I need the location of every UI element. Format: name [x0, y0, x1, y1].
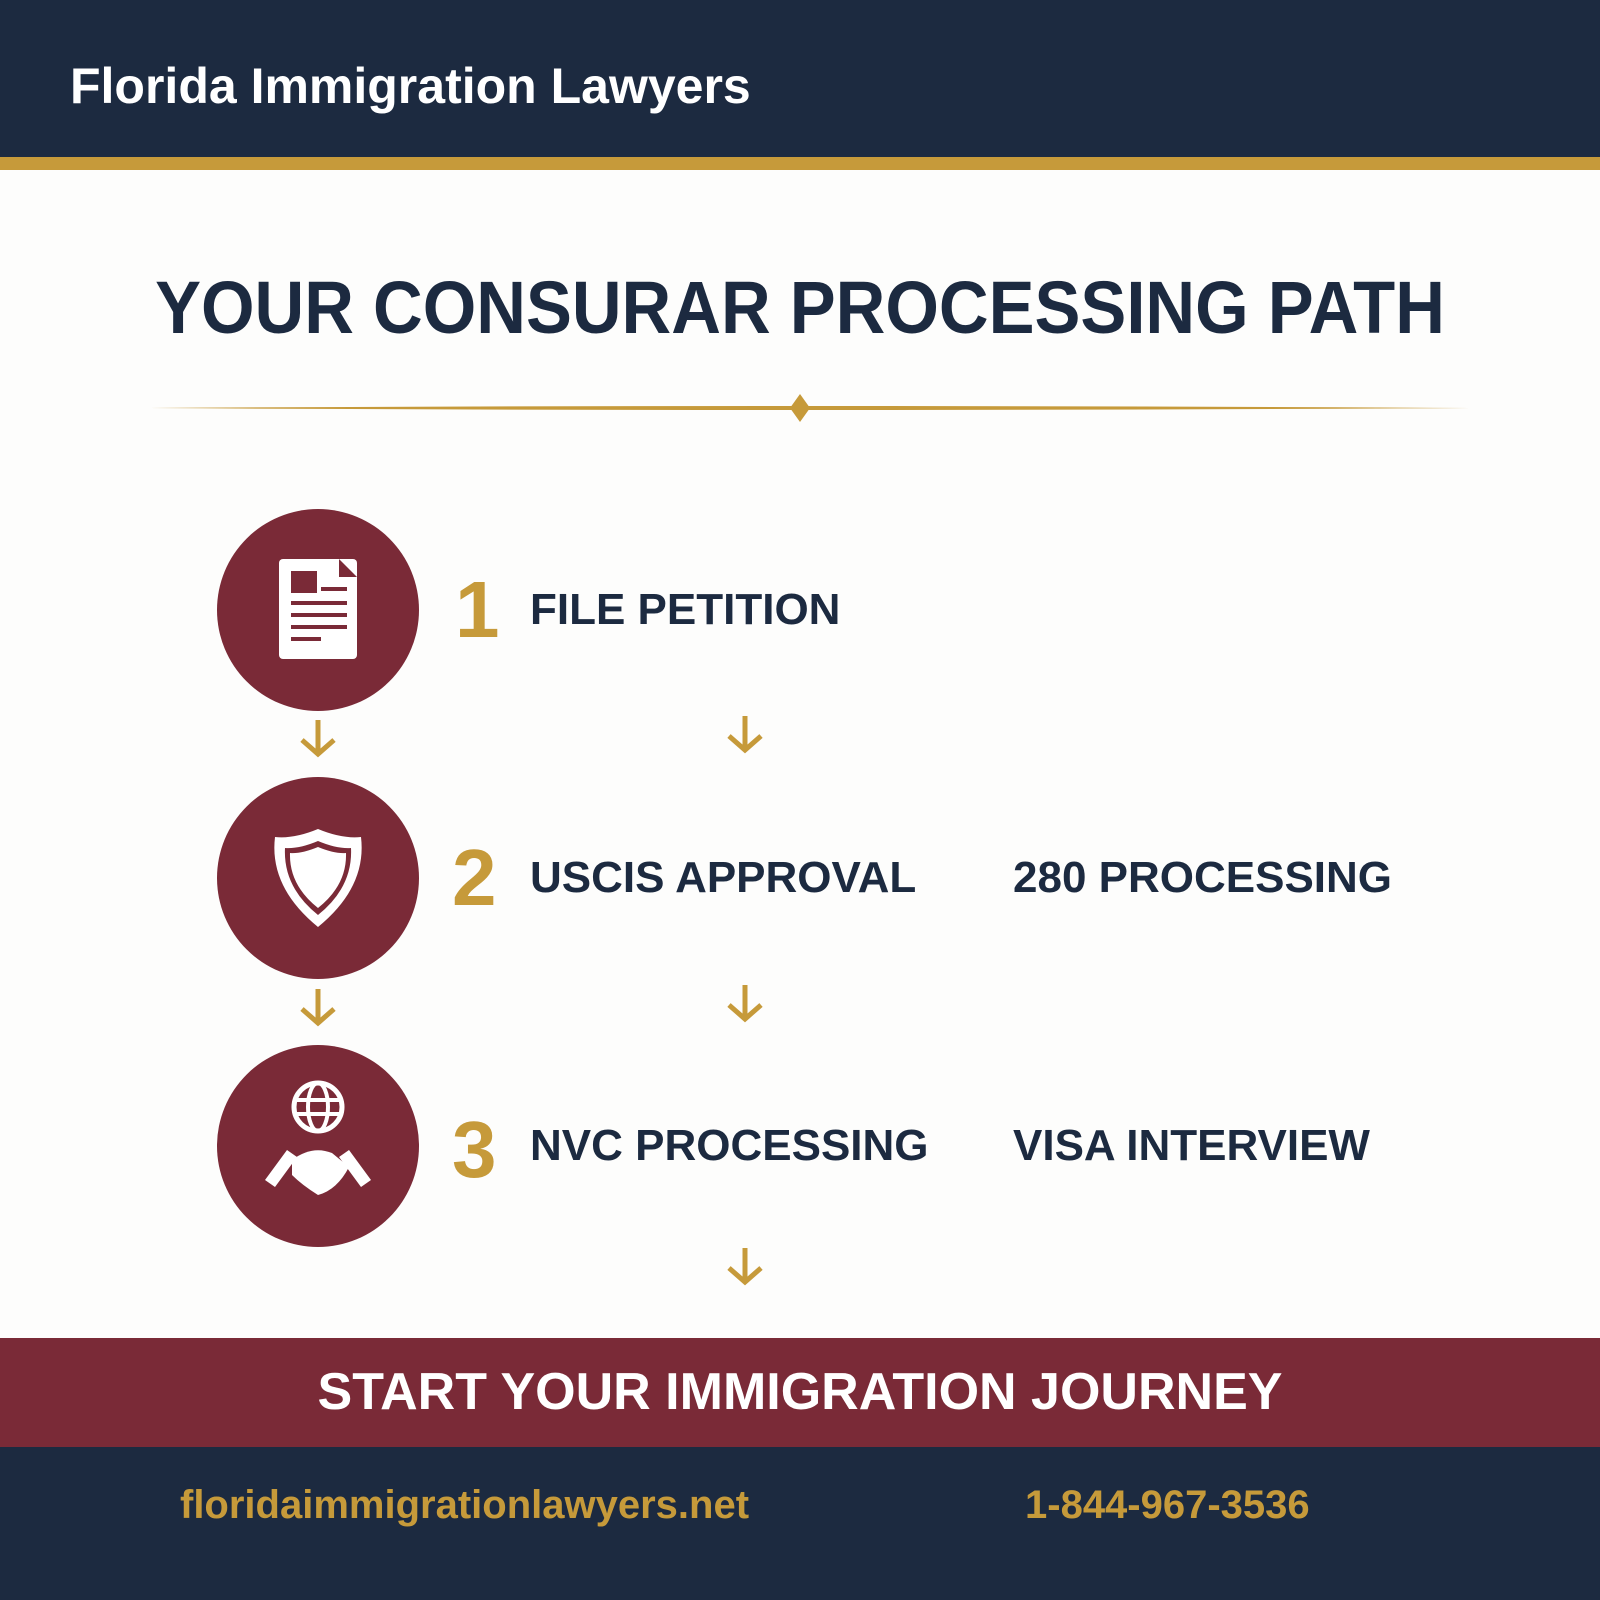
step 2 label: USCIS APPROVAL — [530, 853, 916, 902]
website: floridaimmigrationlawyers.net — [180, 1483, 749, 1527]
arrow below circle 2 — [300, 989, 336, 1026]
step 1 label: FILE PETITION — [530, 585, 840, 634]
step 2 number: 2 — [452, 833, 496, 922]
middle arrow 3 — [727, 1248, 763, 1286]
phone: 1-844-967-3536 — [1025, 1483, 1310, 1527]
step 3 side label: VISA INTERVIEW — [1013, 1121, 1370, 1170]
header bar — [0, 0, 1600, 157]
step 2 icon: shield — [217, 777, 419, 979]
step 3 icon: globe handshake — [217, 1045, 419, 1247]
middle arrow 2 — [727, 985, 763, 1022]
step 2 side label: 280 PROCESSING — [1013, 853, 1392, 902]
step 1 icon: document — [217, 509, 419, 711]
step 3 label: NVC PROCESSING — [530, 1121, 929, 1170]
middle arrow 1 — [727, 716, 763, 754]
header title: Florida Immigration Lawyers — [70, 58, 751, 114]
call to action band: START YOUR IMMIGRATION JOURNEY — [318, 1363, 1282, 1421]
step 3 number: 3 — [452, 1105, 496, 1194]
gold divider with diamond — [153, 394, 1467, 422]
main title: YOUR CONSURAR PROCESSING PATH — [155, 266, 1445, 349]
footer — [0, 1447, 1600, 1600]
call to action band — [0, 1338, 1600, 1447]
step 1 number: 1 — [455, 565, 500, 654]
arrow below circle 1 — [300, 720, 336, 758]
